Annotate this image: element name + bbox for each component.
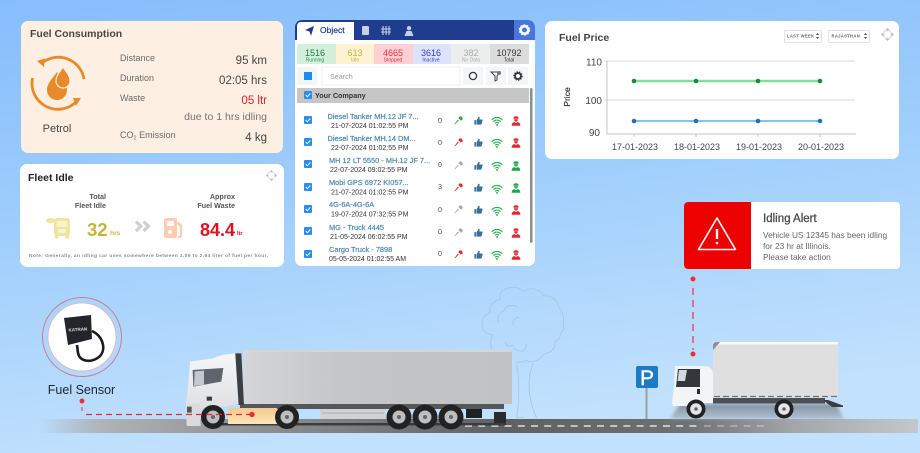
row 1: 21-07-2024 01:02:55 PM (331, 123, 409, 130)
callout: idling alert: Idling Alert (763, 213, 818, 225)
dropdown: last week: LAST WEEK (787, 34, 814, 38)
row 3: MH 12 LT 5550 - MH.12 JF 7... (329, 156, 430, 165)
row 4: 3 (438, 182, 442, 191)
value: 32 hrs: hrs (110, 230, 120, 237)
icon: chevrons (136, 222, 148, 231)
illustration: semi truck (186, 350, 512, 430)
row 3 (304, 156, 520, 174)
row 4: 21-07-2024 01:02:55 PM (331, 190, 409, 196)
status counters (297, 44, 529, 64)
header tabs (295, 20, 535, 40)
sign: parking (636, 366, 658, 419)
scrollbar (530, 88, 532, 243)
illustration: tree outline (482, 287, 564, 418)
icon: warning triangle (698, 218, 736, 250)
line chart: 19-01-2023 (736, 142, 782, 152)
metric: co2 emission: CO (120, 130, 134, 140)
label: petrol: Petrol (43, 123, 71, 135)
illustration: idle delivery truck (670, 342, 844, 419)
status counters: 3616 (421, 48, 441, 58)
label: approx fuel waste: Fuel Waste (197, 201, 235, 210)
note: Note: Generally, an idling car uses somewhere between 1.09 to 2.64 liter of fuel per hour. (29, 253, 269, 259)
series: green (632, 79, 822, 83)
row 5: 4G-6A-4G-6A (329, 200, 374, 209)
row 3: 22-07-2024 09:02:55 PM (330, 167, 408, 174)
label: total fleet idle: Fleet Idle (75, 201, 106, 210)
company header (297, 88, 529, 103)
series: blue (632, 119, 822, 123)
status counters: 1516 (305, 48, 325, 58)
icon: fuel sensor (42, 298, 122, 376)
dropdown: last week (784, 30, 822, 42)
value: 32 hrs: 32 (87, 219, 108, 240)
row 5: 0 (438, 205, 442, 214)
dropdown: rajasthan (828, 30, 870, 42)
status counters: Inactive (422, 58, 440, 64)
connector: sensor to tank (80, 398, 255, 417)
search toolbar: Search (330, 72, 353, 81)
row 7: 0 (438, 249, 442, 258)
fuel tank highlight (228, 408, 277, 424)
metric: duration: 02:05 hrs (219, 75, 267, 87)
metric: waste: 05 ltr (241, 95, 267, 107)
metric: duration: Duration (120, 73, 154, 83)
row 1: 0 (438, 116, 442, 125)
panel: fleet idle (20, 164, 284, 267)
value: 32 hrs (87, 219, 120, 240)
row 6: 0 (438, 227, 442, 236)
metric: duration (120, 73, 267, 87)
row 5 (304, 200, 520, 218)
metric: co2 emission (120, 130, 267, 144)
icon: expand (266, 170, 277, 181)
label: fuel sensor: Fuel Sensor (48, 383, 115, 397)
value: 84.4 ltr: 84.4 (200, 220, 235, 240)
row 6 (304, 223, 520, 241)
dropdown: rajasthan: RAJASTHAN (832, 34, 860, 38)
header tabs: Object (320, 25, 345, 35)
metric: co2 emission: 4 kg (245, 132, 267, 144)
callout: idling alert: Vehicle US 12345 has been idling (763, 230, 887, 240)
label: total fleet idle: Total (89, 192, 106, 201)
line chart: 18-01-2023 (674, 142, 720, 152)
row 4 (304, 178, 520, 196)
line chart: 90 (589, 128, 600, 139)
status counters: Running (306, 58, 325, 64)
callout: idling alert (684, 202, 900, 269)
road (40, 419, 918, 433)
line chart: 17-01-2023 (612, 142, 658, 152)
status counters: 4665 (383, 48, 403, 58)
icon: fuel pump (164, 218, 182, 238)
panel: fuel price (545, 21, 899, 159)
metric: waste: due to 1 hrs idling (184, 111, 267, 123)
line chart (562, 58, 856, 152)
icon: fuel sensor: KATRAN (68, 326, 87, 333)
row 1 (304, 112, 520, 130)
label: approx fuel waste: Approx (210, 192, 235, 201)
heading: fuel consumption: Fuel Consumption (30, 28, 122, 40)
metric: distance: 95 km (236, 55, 267, 67)
heading: fleet idle: Fleet Idle (28, 172, 74, 184)
status counters: Idle (351, 58, 359, 64)
icon: expand (881, 28, 894, 41)
row 4: Mobi GPS 6972 KI057... (329, 178, 409, 187)
search toolbar (297, 67, 528, 85)
status counters: No Data (462, 58, 480, 64)
metric: co2 emission: Emission (137, 130, 176, 140)
status counters: Stopped (384, 58, 403, 64)
callout: idling alert: for 23 hr at Illinois. (763, 241, 831, 251)
row 3: 0 (438, 160, 442, 169)
callout: idling alert: Please take action (763, 252, 831, 262)
metric: distance: Distance (120, 53, 155, 63)
line chart: 100 (585, 96, 602, 107)
row 6: MG - Truck 4445 (329, 223, 384, 232)
row 7: Cargo Truck - 7898 (329, 245, 392, 254)
metric: waste (120, 93, 267, 123)
icon: fuel drop with cycle arrows (32, 57, 84, 109)
status counters: 613 (347, 48, 363, 58)
row 2: 0 (438, 138, 442, 147)
heading: fuel price: Fuel Price (559, 32, 609, 44)
row 2: 22-07-2024 01:02:55 PM (331, 145, 409, 152)
y axis title: Price (562, 87, 572, 107)
panel: object list (295, 20, 535, 266)
row 2: Diesel Tanker MH.14 DM... (328, 134, 416, 143)
metric: co2 emission: 2 (134, 136, 137, 142)
icon: idle truck (46, 218, 70, 238)
value: 84.4 ltr: ltr (237, 231, 243, 237)
metric: waste: Waste (120, 93, 145, 103)
status counters: 382 (463, 48, 479, 58)
connector: alert to truck (690, 276, 696, 356)
metric: distance (120, 53, 267, 67)
status counters: Total (504, 58, 514, 64)
sign: parking: P (640, 367, 654, 390)
panel: fuel consumption (21, 21, 283, 153)
row 2 (304, 134, 520, 152)
row 7 (304, 245, 520, 263)
status counters: 10792 (496, 48, 522, 58)
line chart: 110 (586, 58, 602, 68)
row 7: 05-05-2024 01:02:55 AM (329, 256, 406, 263)
row 5: 19-07-2024 07:32:55 PM (331, 212, 409, 218)
row 1: Diesel Tanker MH.12 JF 7... (328, 112, 419, 121)
row 6: 21-05-2024 06:02:55 PM (330, 234, 408, 241)
line chart: 20-01-2023 (798, 142, 844, 152)
company header: Your Company (315, 91, 366, 100)
